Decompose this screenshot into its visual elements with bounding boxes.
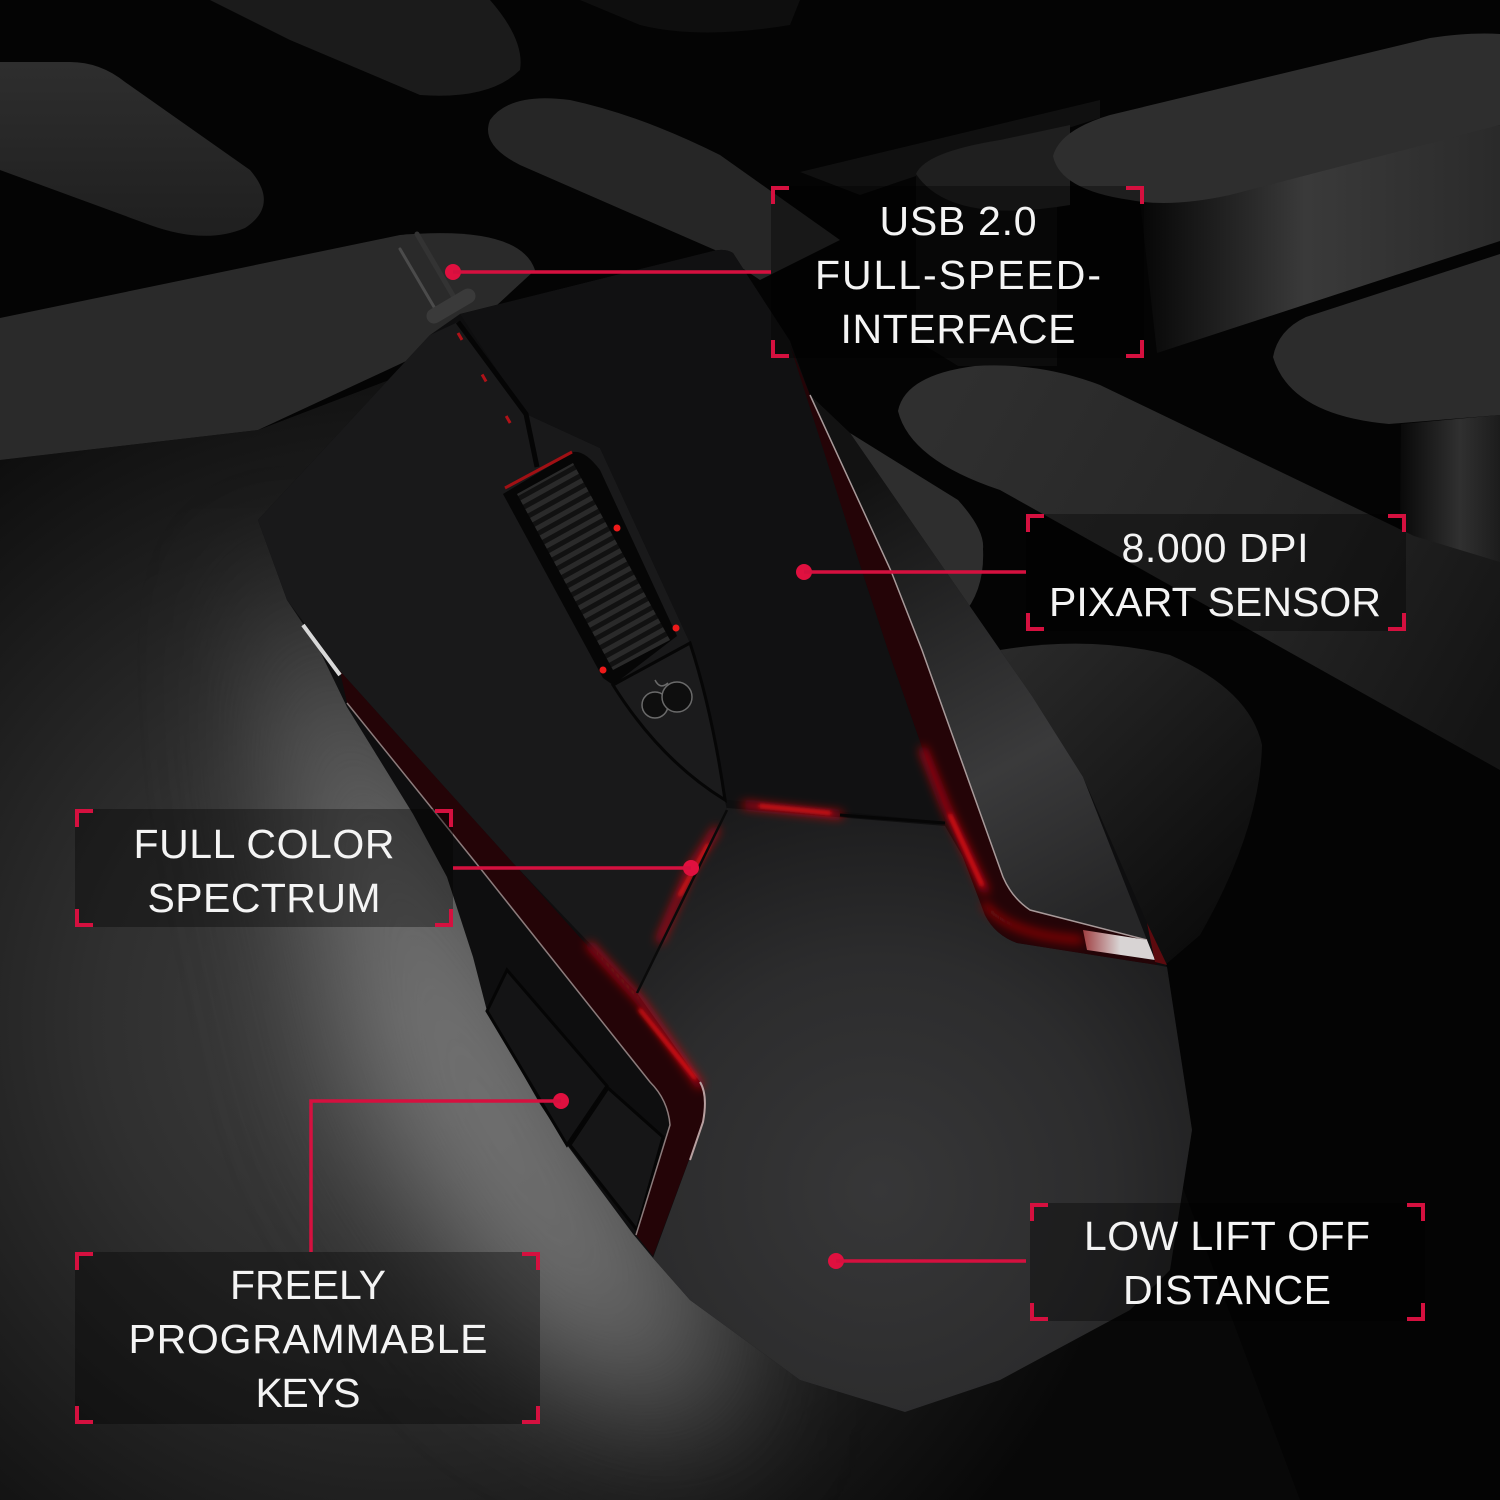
- callout: programmable keys: [75, 1252, 540, 1424]
- callout: USB interface: [771, 186, 1144, 358]
- left shell: [258, 322, 727, 993]
- callout: full color spectrum: [75, 809, 453, 927]
- side buttons: [487, 970, 663, 1230]
- pointer: low lift off distance: [828, 1253, 1026, 1269]
- callout: USB interface: INTERFACE: [840, 306, 1076, 352]
- callout: low lift off distance: LOW LIFT OFF: [1084, 1213, 1370, 1259]
- callout: DPI sensor: PIXART SENSOR: [1049, 579, 1381, 625]
- background floor glow: [0, 381, 1020, 1500]
- pointer: USB interface: [445, 264, 771, 280]
- callout: low lift off distance: DISTANCE: [1123, 1267, 1331, 1313]
- red tip: [1147, 923, 1167, 965]
- callout: programmable keys: KEYS: [256, 1370, 360, 1416]
- mouse: [258, 250, 1192, 1412]
- palm rest: [637, 808, 1192, 1412]
- red light cores: [640, 806, 982, 1078]
- right shell panel: [810, 395, 1147, 940]
- red glow: [590, 750, 1080, 1085]
- callout: full color spectrum: FULL COLOR: [134, 821, 394, 867]
- callout: programmable keys: PROGRAMMABLE: [128, 1316, 488, 1362]
- cable: [400, 234, 468, 316]
- wheel led dots: [600, 524, 723, 792]
- scroll wheel well: [503, 452, 677, 685]
- callout: programmable keys: FREELY: [230, 1262, 386, 1308]
- callout: full color spectrum: SPECTRUM: [148, 875, 380, 921]
- callout: DPI sensor: 8.000 DPI: [1122, 525, 1308, 571]
- mouse body: [258, 250, 1192, 1412]
- wheel top red edge: [505, 452, 572, 488]
- red band: right: [790, 345, 1157, 965]
- red band: left: [340, 671, 705, 1256]
- pointer: programmable keys: [311, 1093, 569, 1252]
- callout: USB interface: FULL-SPEED-: [815, 252, 1101, 298]
- band flash highlight: [1083, 930, 1155, 960]
- callout: low lift off distance: [1030, 1203, 1425, 1321]
- top shell: [460, 250, 945, 822]
- callout: USB interface: USB 2.0: [880, 198, 1036, 244]
- scroll wheel: [517, 463, 670, 670]
- seam dashes: [458, 333, 516, 433]
- pointer: DPI sensor: [796, 564, 1026, 580]
- pointer: full color spectrum: [453, 860, 699, 876]
- cherry logo: [642, 680, 692, 718]
- callout: DPI sensor: [1026, 514, 1406, 631]
- seams and thin highlights: [303, 322, 1147, 1235]
- logo shield: [613, 643, 725, 800]
- background pill shapes: [0, 0, 1500, 965]
